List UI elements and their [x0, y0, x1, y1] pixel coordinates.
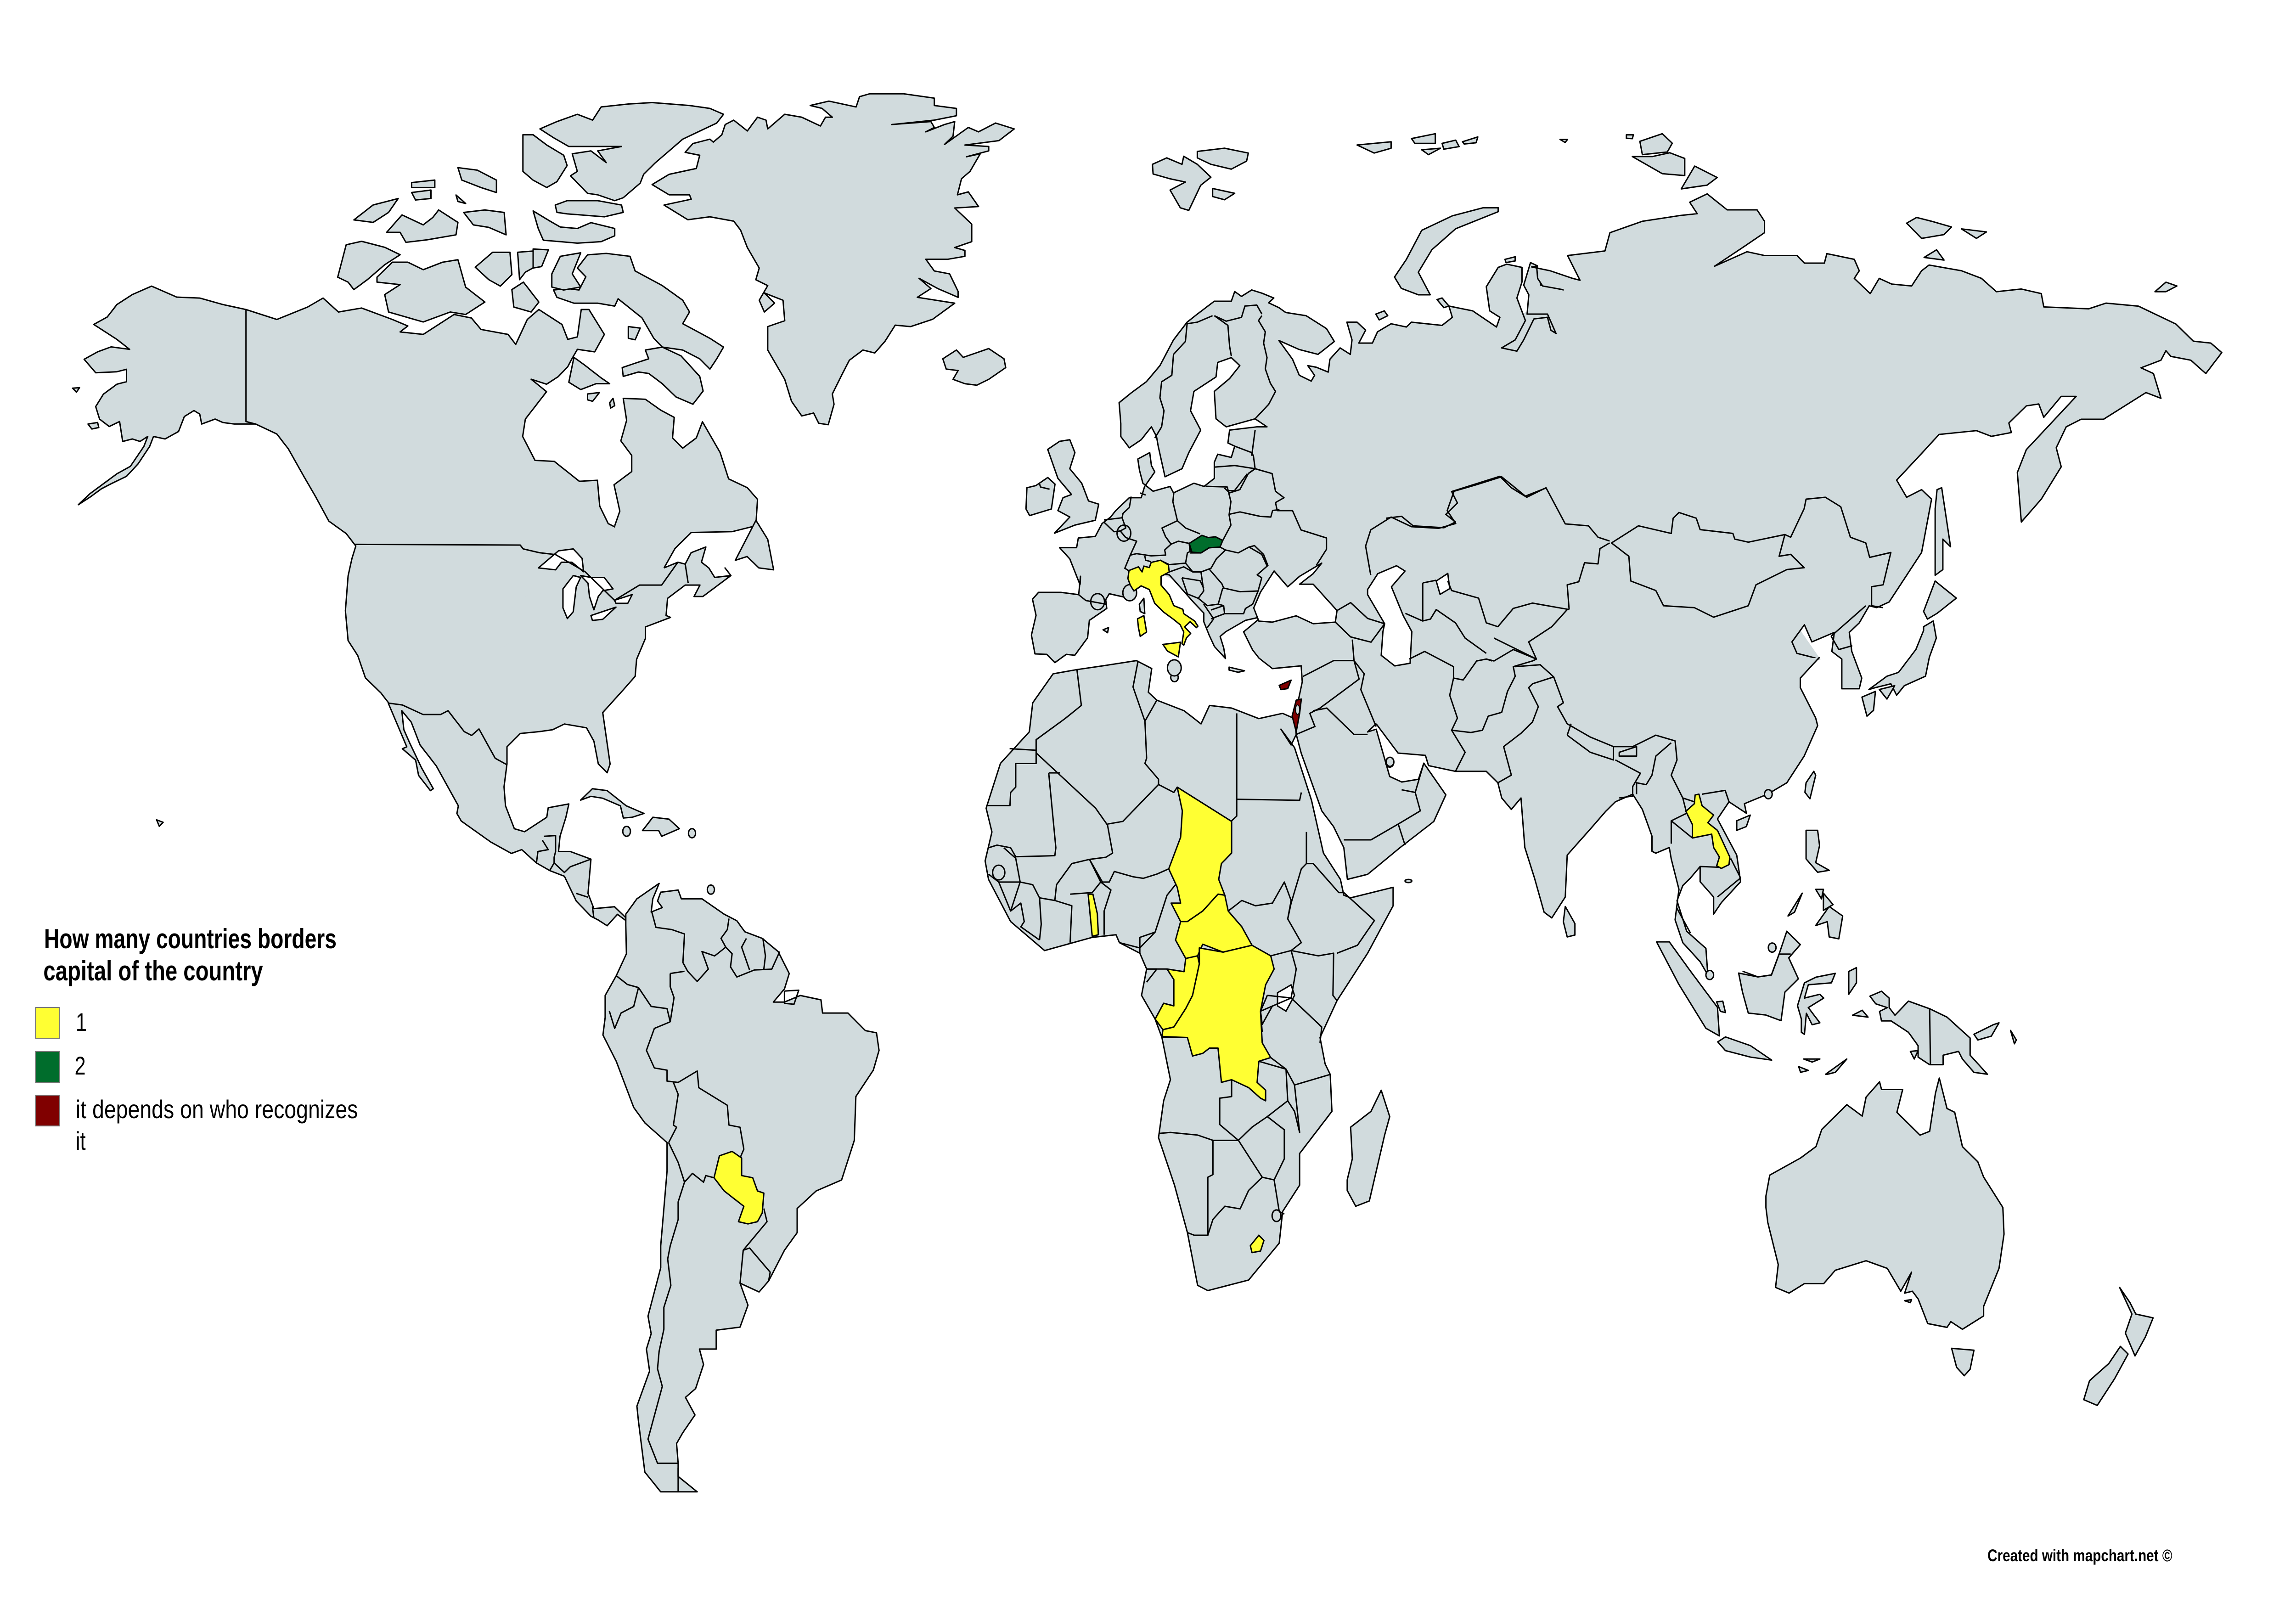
Balkans [1162, 574, 1262, 658]
Sardinia [1137, 616, 1147, 636]
Great Lakes [539, 549, 632, 620]
legend entry: 2 [35, 1052, 86, 1082]
UK and Ireland [1048, 440, 1099, 533]
legend entry: 1 [35, 1007, 87, 1038]
Greenland [652, 94, 1014, 425]
China, South and Southeast Asia [1376, 657, 1819, 975]
legend [35, 923, 358, 1155]
Republic of the Congo [1155, 956, 1199, 1030]
Indonesia, New Guinea, Australia and New Zealand [1716, 968, 2153, 1406]
legend entry: it depends on who recognizes it: it depends on who recognizes [76, 1095, 358, 1124]
Corsica [1139, 598, 1145, 613]
Monaco marker [1123, 585, 1137, 601]
North America: Quebec and Labrador [614, 399, 758, 568]
legend title: capital of the country [43, 956, 263, 986]
Slovakia [1189, 535, 1223, 553]
Democratic Republic of the Congo [1162, 945, 1274, 1101]
Lake Victoria [1277, 985, 1294, 1011]
Madagascar [1347, 1090, 1390, 1206]
Borneo border [1743, 954, 1791, 977]
Aral Sea [1436, 574, 1450, 594]
Africa and Middle East borders [986, 602, 1424, 1235]
Newfoundland and Caribbean islands [580, 520, 774, 894]
Chad [1169, 787, 1232, 922]
Africa [985, 661, 1393, 1291]
Crete [1229, 667, 1244, 672]
Europe north and western Russia [1060, 263, 1564, 585]
South America [603, 883, 879, 1492]
credit line: Created with mapchart.net © [1987, 1547, 2172, 1565]
Malta marker [1167, 660, 1181, 676]
legend entry: 2: 2 [75, 1052, 86, 1080]
highlighted countries in Africa [1088, 680, 1301, 1253]
Lesotho [1250, 1235, 1264, 1253]
Italy mainland [1128, 560, 1198, 645]
South America borders [609, 912, 799, 1492]
North America: Alaska and western Canada [79, 286, 615, 703]
Israel [1292, 699, 1301, 732]
West Bank [1295, 705, 1300, 715]
Europe borders [1040, 474, 1279, 628]
East Russia [1531, 194, 2222, 689]
Central African Republic [1176, 894, 1252, 958]
highlighted country: Laos [1686, 794, 1730, 868]
Central America borders [355, 544, 688, 918]
Iberia and southern France [1080, 585, 1133, 597]
small-country markers in Africa and Middle East [993, 673, 1412, 1221]
Siberian Arctic islands [1560, 134, 2177, 292]
Balearic Islands [1103, 628, 1109, 633]
Arctic Russian islands and Svalbard [1153, 134, 1515, 320]
North America: USA, Mexico and Central America [388, 547, 731, 926]
Alaska border [246, 309, 256, 424]
Black Sea, Caspian Sea and inland water [1254, 563, 1412, 666]
Canadian Arctic islands (east) [523, 102, 724, 408]
Canadian Arctic islands (west) [73, 168, 548, 826]
legend entry: it depends on who recognizes it: it [76, 1127, 86, 1155]
Luxembourg marker [1117, 525, 1131, 541]
legend title [43, 923, 337, 986]
Cyprus [1279, 680, 1291, 690]
Turkey and Arabian Peninsula [1244, 617, 1446, 879]
Sicily [1163, 642, 1181, 657]
legend title: How many countries borders [44, 923, 337, 954]
land interior fill [388, 290, 1819, 724]
Japan, Sakhalin, Taiwan, Philippines and Southeast Asian islands [1386, 488, 1956, 1036]
highlighted country: Paraguay [714, 1151, 764, 1224]
Andorra marker [1091, 594, 1104, 610]
Ireland [1026, 478, 1055, 516]
Asia borders [1386, 476, 1891, 933]
legend entry: it depends on who recognizes it [35, 1095, 358, 1155]
Togo [1088, 894, 1098, 936]
highlighted countries in Europe [1128, 535, 1223, 657]
legend entry: 1: 1 [76, 1008, 87, 1036]
Scandinavia and Russia borders [1155, 305, 1546, 575]
Iceland [943, 349, 1006, 385]
